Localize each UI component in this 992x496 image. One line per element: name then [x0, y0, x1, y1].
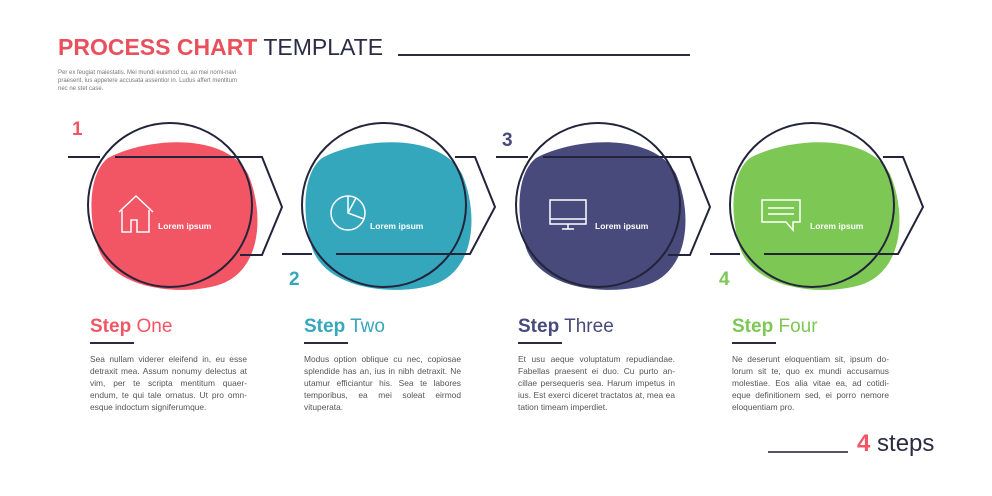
title rule: [398, 54, 690, 56]
step four text: Ne deserunt eloquentiam sit, ipsum do-lorum sit te, quo ex mundi accusamus molestiae. Eos alia vitae ea, ad cotidi-eque definitionem sed, ei porro nemore eloquentiam pro.: [732, 354, 889, 412]
step one heading: Step One: [90, 316, 172, 337]
step 3 graphic: Lorem ipsum: [595, 221, 649, 231]
step 4 graphic: Lorem ipsum: [810, 221, 864, 231]
step 2 graphic: 2: [289, 269, 300, 290]
icon: house: [119, 196, 153, 232]
step two text: Modus option oblique cu nec, copiosae splendide has an, ius in nibh detraxit. Ne utamur efficiantur his. Sea te labores temporibus, ea mei soleat eirmod vituperata.: [304, 354, 461, 412]
step 1 graphic: Lorem ipsum: [158, 221, 212, 231]
step one text: Sea nullam viderer eleifend in, eu esse detraxit mea. Assum nonumy delectus at vim, per te scripta mentitum quaer-endum, te qui tale ornatus. Ut pro omn-esque indoctum signiferumque.: [90, 354, 247, 412]
step 2 graphic: [282, 123, 495, 290]
step four heading: Step Four: [732, 316, 818, 337]
icon: pie chart: [331, 196, 365, 230]
step three text: Et usu aeque voluptatum repudiandae. Fabellas praesent ei duo. Cu purto an-cillae persequeris sea. Harum impetus in ius. Est exerci diceret tractatos at, mea ea tation timeam imperdiet.: [518, 354, 675, 412]
step 1 graphic: 1: [72, 119, 83, 140]
diagram: [68, 119, 924, 290]
icon: monitor: [550, 200, 586, 229]
step two heading: Step Two: [304, 316, 385, 337]
step 4 graphic: [710, 123, 923, 290]
title: PROCESS CHART TEMPLATE: [58, 34, 383, 60]
step three heading: Step Three: [518, 316, 614, 337]
footer rule: [768, 451, 848, 453]
step 3 graphic: 3: [502, 130, 513, 151]
step 2 graphic: Lorem ipsum: [370, 221, 424, 231]
step 1 graphic: [68, 119, 282, 290]
step 3 graphic: [496, 123, 710, 290]
icon: chat: [762, 200, 800, 230]
subtitle: Per ex feugiat maiestatis. Mei mundi euismod cu, ao mei nomi-navi praesent, ius appetere accusata assentior in. Ludus affert mentitum nec ne stet case.: [58, 70, 237, 92]
step 4 graphic: 4: [719, 269, 730, 290]
footer: 4 steps: 4 steps: [857, 430, 934, 457]
